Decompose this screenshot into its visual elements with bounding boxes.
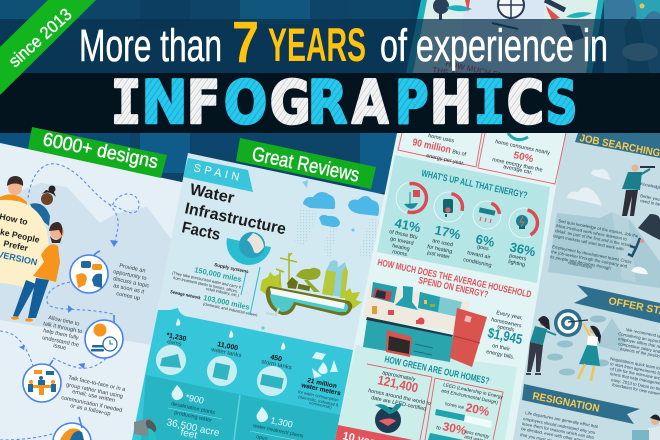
illustration: kitchen [363,282,487,367]
icon: sprout in hand [375,404,402,433]
infographics band [0,73,660,133]
step text 2 [42,315,83,352]
icon: bulb and clock [85,315,123,358]
stat: 36 percent: lighting [508,259,526,269]
step text 2: Allow time to [48,315,80,328]
corner ribbon: since 2013 [0,0,96,95]
job searching mountain scene: detail, as part of the first and is the result [555,228,633,248]
highlighted: 7 years: YEARS [268,18,366,71]
stat box: 90 million: 90 million [411,137,452,156]
fact: water meters: commercial) [309,400,333,410]
stat box: LEED: and Environmental Design) [441,388,499,406]
fact: water meters: 21 million [307,377,337,390]
title: water infrastructure facts [180,181,288,244]
stat box: LEED: 20% [464,400,491,419]
stat box: LEED: to [436,425,441,432]
dashed route [0,164,139,440]
sewage network text: 103,000 miles [203,293,250,312]
person with telescope [622,164,655,216]
stat box: LEED: 30% [441,419,468,438]
stat: 41 percent: of those Btu [389,229,418,241]
stat: average bill $1,945: on their [492,343,511,353]
corner ribbon: since 2013: since 2013 [5,5,76,71]
left and right foliage [260,272,362,312]
stat: 17 percent: are used [432,238,453,248]
stat: 6 percent: conditioning [463,257,492,269]
stat: average bill $1,945: $1,945 [486,324,524,347]
highlighted: 7 years: 7 [232,10,259,75]
step text 3: email; use written [72,389,115,404]
headline: more than 7 years of experience in: More than [79,20,222,71]
supply systems text [172,262,249,298]
headline: infographics: S [546,68,577,138]
headline: infographics [111,68,577,138]
headline: infographics: R [308,68,348,138]
section: what's up all that energy: WHAT'S UP ALL THAT ENERGY? [420,168,528,201]
stat: 6 percent: 6% [474,231,496,250]
job searching mountain scene: Sed quia knowledge of the market, Job the [558,218,639,239]
fact: desalination plants: 36,500 acre [165,417,221,439]
stat: 17 percent: 17% [433,222,462,242]
panel: how to make people prefer [0,143,200,440]
offer stage text: competitive salary and [618,341,660,354]
fact: water meters: water meters [300,382,342,397]
stat box: 90 million: energy per year. [426,153,465,167]
stat box: 90 million [398,133,482,167]
donut: 36 percent [507,206,541,240]
stat: 36 percent: powers [509,253,527,263]
stat box: 121,400 homes: 121,400 [376,372,420,395]
sewage network text: (domestic and industrial sewer) [203,301,259,318]
icon: drain pipe [134,418,158,440]
step text 3: group rather than using [66,382,123,400]
stat box: 121,400 homes: date are LEED-certified [371,395,427,413]
spain header tab [183,158,253,192]
headline: infographics: O [224,68,267,138]
stat: 41 percent: go toward [390,236,414,247]
sewage network text: Sewage network [170,289,202,301]
heading: how green are our homes: HOW GREEN ARE OUR HOMES? [383,354,490,387]
fact: water tanks: water tanks [210,347,242,359]
supply systems text: retail industry, etc.) [206,286,240,298]
stat box: 90 million: Btu of [452,149,467,158]
sewage network text [170,289,259,318]
step text 2: talk it through to [43,321,83,335]
job searching mountain scene [548,164,660,288]
top-right background infographic [406,0,660,81]
stat: average bill $1,945: homeowners [491,317,522,329]
headline: infographics: F [187,68,220,138]
red footer band: 10 years [335,425,413,440]
mountains backdrop [0,183,172,345]
fact: storm tanks: storm tanks [261,359,292,371]
house [287,277,298,289]
stat: average bill $1,945: spends [497,324,515,334]
speech bubble text: Prefer [3,238,30,253]
stat box: 50 percent: average car. [503,164,533,176]
fact: desalination plants [165,385,222,440]
supply systems text: (They take pressurized water and carry it [172,270,242,290]
fact: desalination plants: *900 [185,392,205,406]
step text 1 [113,263,150,302]
stat: 41 percent: heating [392,243,410,253]
stat: 41 percent: 41% [393,215,422,235]
headline: infographics: H [430,68,472,138]
heading: how much does the average household spend: HOW MUCH DOES THE AVERAGE HOUSEHOLD [376,257,532,301]
highlighted: 7 years [232,10,366,75]
dim overlay behind heading [0,19,660,73]
fact: dams: *1,230 [166,332,187,343]
resignation text and person [520,410,660,440]
stat box: 121,400 homes: homes around the world to [368,388,431,407]
spain header tab: SPAIN [192,162,244,184]
stat box: LEED [425,378,504,440]
stat box: 90 million: home uses [428,133,455,145]
job searching mountain scene: relationships [568,260,592,270]
illustration: three people with speech bubble [0,176,64,322]
stat box: 50 percent: more energy than the [492,157,543,174]
icon: bottom step [53,417,91,440]
headline: infographics: I [474,68,506,138]
buildings [326,260,338,296]
stat box: 50 percent: home consumes nearly [495,139,551,157]
fact: water tanks: 11,000 [217,341,239,352]
stat box: LEED: homes use [445,401,465,410]
heading: how much does the average household spend [376,257,532,301]
fact: desalination plants: producing water [174,410,213,424]
step text 2: help them fully [43,328,79,341]
step text 3 [61,375,127,417]
offer stage text: foundation for new career [612,382,660,396]
stat: 17 percent: for heating [427,244,453,255]
stat: 17 percent: just water [426,250,451,261]
supply systems text: 150,000 miles [194,265,242,284]
offer stage text [610,327,660,396]
tag: 6000+ designs: 6000+ designs [41,129,160,173]
step text 1: opportunity to [113,269,147,282]
fact: dams [156,318,187,375]
heading: resignation [522,384,640,424]
job searching mountain scene: its people and decisions through [550,254,612,271]
icon: globe on arc [227,232,271,265]
step text 3: or as a follow-up [70,403,111,417]
job searching mountain scene: target markets will start and work with [553,233,625,252]
heading: offer stage [574,285,660,323]
resignation text and person: leave them for reasons which can also [522,421,595,440]
panel: job searching [480,132,660,440]
tag: great reviews: Great Reviews [250,143,361,187]
fact: desalination plants: desalination plants [171,401,216,416]
falling person with balloon [628,214,660,256]
step text 1: comes up [116,291,141,302]
section: what's up all that energy [377,155,550,283]
stat: average bill $1,945: energy bills. [486,349,515,361]
icon: conversation [70,251,108,293]
speech bubble text [0,211,41,267]
job searching mountain scene: Employment by development teams Cross [552,244,632,264]
icon: meeting [23,360,61,402]
illustration: clouds and rain [294,180,385,262]
step text 1: Provide an [119,263,146,275]
fact: water meters [298,352,342,410]
step text 2: issue [53,343,67,352]
tree [296,268,320,280]
fact: storm tanks: 450 [270,354,283,363]
stat: 41 percent [389,215,422,258]
step text 1: discuss a topic [113,276,150,290]
fact: storm tanks [257,342,292,396]
step text 1: as soon as it [113,283,145,296]
dashed route arrows [19,240,118,369]
illustration: eco city on water tray [260,253,362,330]
supply systems text: from treatment plants to homes, offices, [173,275,238,294]
panel: spain water infrastructure [132,153,400,440]
stat box: 50 percent: 50% [512,150,534,165]
fact: dams: dams [167,339,182,348]
fact: water tanks [207,330,242,386]
headline: infographics: G [270,68,311,138]
stat: 36 percent [508,239,537,269]
stat box: 121,400 homes: approximately [382,370,416,383]
panel: energy [335,133,566,440]
title: water infrastructure facts: Facts [180,219,222,244]
stat: 6 percent [463,231,496,269]
headline: infographics: C [507,68,544,138]
headline: infographics: I [111,68,141,138]
step text 3: Talk face-to-face or in a [68,375,127,393]
tray [266,286,352,316]
headline: infographics: N [141,68,188,138]
step text 2: understand the [42,335,79,349]
title: water infrastructure facts: Infrastructure [183,200,288,238]
headline: infographics: A [352,68,389,138]
supply systems text: Supply systems [214,262,249,274]
fact: water meters: (domestic, industrial & [298,394,339,408]
donut: 17 percent [433,191,465,223]
stat: 17 percent [426,222,462,261]
illustration: woman with hands on hips [526,316,556,374]
resignation text and person: employers should understand why you [523,416,596,435]
step text 3: communication if needed [61,395,123,414]
fact: water meters: for water consumption [298,389,340,403]
fact: water treatment plants [250,407,304,440]
fact: water treatment plants: water treatment plants [253,423,304,440]
title: water infrastructure facts: Water [188,181,236,207]
stat: 6 percent: toward air [467,250,491,261]
stat: 6 percent: goes [477,244,490,252]
illustration: target and archer [547,309,626,381]
stat box: LEED: less energy [465,429,490,440]
stat: average bill $1,945 [486,310,524,361]
stat box: 50 percent [478,133,566,184]
fact: water treatment plants: 1,300 [270,415,294,430]
stat: 41 percent: rooms [392,249,408,258]
stat: average bill $1,945: Every year, [496,310,524,322]
headline: infographics: P [395,68,428,138]
top-right background infographic: THE AV [432,65,462,80]
stat box: LEED: LEED (Leadership in Energy [443,382,504,401]
job searching mountain scene: Most involved work where attention to [556,223,628,242]
teal facts block [132,308,353,440]
heading: how much does the average household spend: SPEND ON ENERGY? [417,275,489,301]
resignation text and person: Life departures are generally effort that [525,410,599,429]
heading: resignation: RESIGNATION [531,390,600,415]
wind turbines [276,253,297,287]
donut: 41 percent [395,181,429,215]
stat: 36 percent: 36% [508,239,537,259]
offer stage text: of Life for the interview and [610,366,660,381]
section background: how green [335,345,517,440]
headline: more than 7 years of experience in [79,10,608,75]
donut: 6 percent [471,199,503,231]
job searching mountain scene: the job-seeker through the company and [551,249,628,269]
top-right background infographic: HOW MUCH ENE [445,59,510,81]
stat box: 121,400 homes [367,364,432,440]
